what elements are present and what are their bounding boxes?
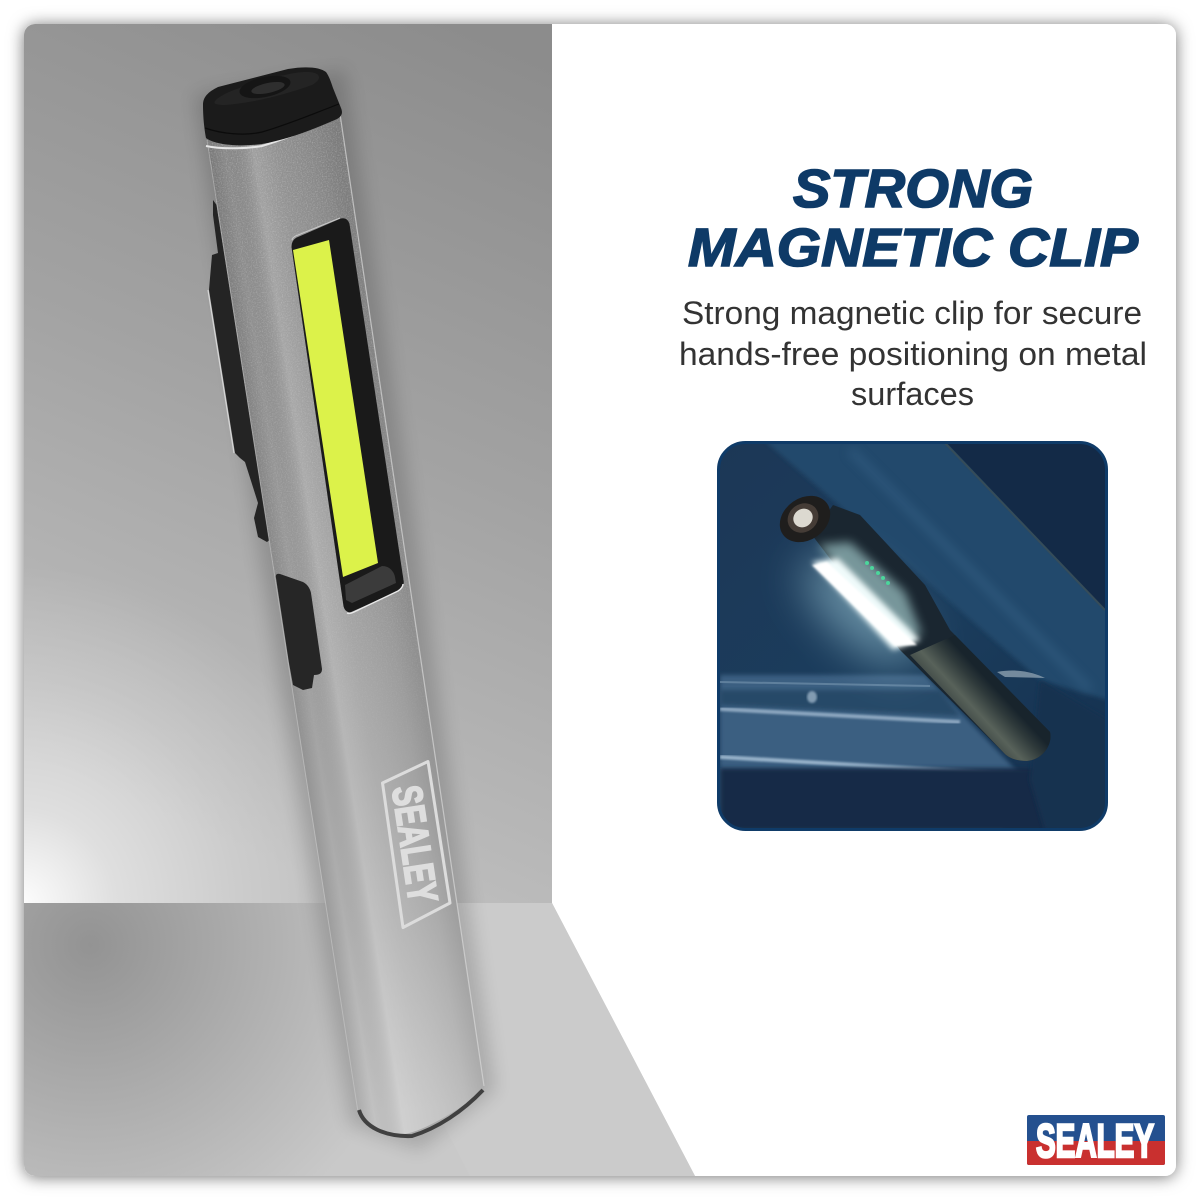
product: pen torch	[203, 67, 484, 1138]
body text: Strong magnetic clip for secure	[682, 295, 1142, 331]
USB port cover	[276, 574, 322, 690]
pen clip	[208, 200, 272, 542]
torch lit LED	[812, 542, 922, 650]
photo: torch attached to vehicle	[717, 441, 1108, 831]
panel: studio backdrop	[24, 24, 695, 1176]
pen shadow	[195, 70, 495, 1150]
body text	[679, 295, 1147, 412]
vehicle panels	[720, 441, 1108, 831]
pen cap	[203, 67, 342, 145]
pen base ring	[359, 1090, 483, 1136]
body text: surfaces	[851, 376, 974, 412]
torch	[771, 486, 1050, 761]
heading: STRONG	[793, 159, 1033, 219]
heading: MAGNETIC CLIP	[688, 218, 1139, 278]
pen body	[206, 116, 484, 1134]
COB light window	[292, 218, 403, 613]
heading	[688, 159, 1139, 278]
light glow	[787, 538, 937, 682]
engraved logo: SEALEY	[383, 782, 447, 906]
body text: hands-free positioning on metal	[679, 336, 1147, 372]
